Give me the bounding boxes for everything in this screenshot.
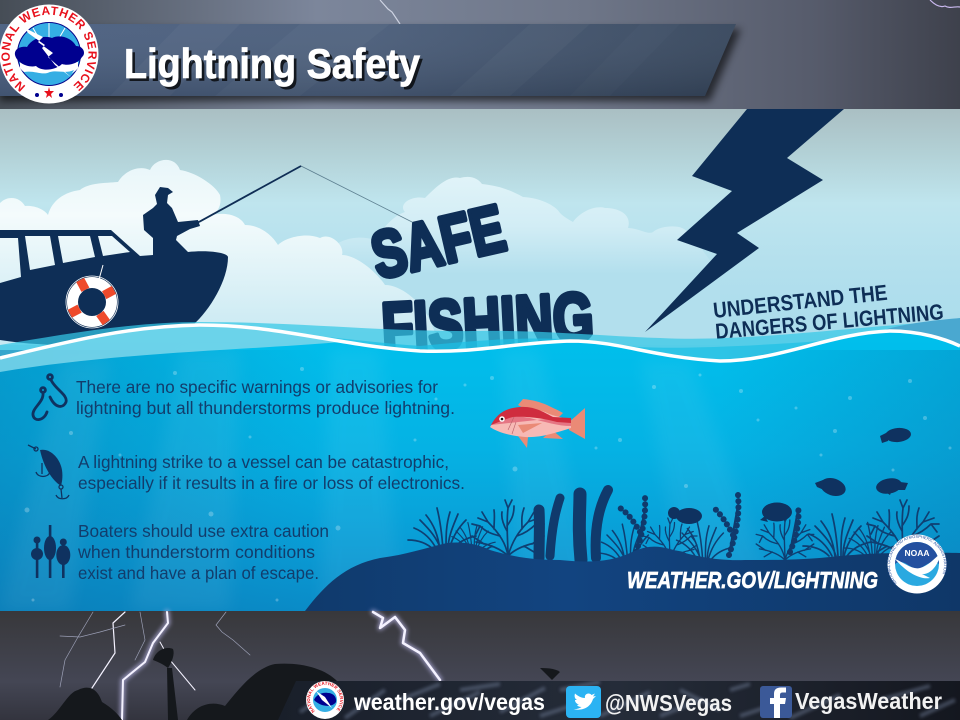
text block: warnings: lightning but all thunderstorms produce lightning. [76, 398, 455, 418]
icon: facebook [760, 686, 792, 718]
coral silhouettes [408, 490, 939, 562]
twitter handle: @NWSVegas [605, 690, 732, 716]
clouds, front layer [0, 160, 440, 345]
social bar [278, 681, 960, 720]
text block: warnings [76, 377, 455, 418]
text block: caution: Boaters should use extra caution [78, 521, 329, 541]
main panel: sky [0, 109, 960, 611]
text block: caution: exist and have a plan of escape. [78, 563, 319, 583]
tagline: UNDERSTAND THE [712, 280, 889, 323]
NOAA logo: NOAA [904, 548, 930, 558]
NWS logo: NATIONAL WEATHER SERVICE [1, 6, 97, 92]
text block: warnings: There are no specific warnings or advisories for [76, 377, 438, 397]
website address: WEATHER.GOV/LIGHTNING [627, 567, 878, 593]
SAFE FISHING heading: FISHING [380, 278, 595, 367]
title: Lightning Safety [127, 43, 424, 90]
SAFE FISHING heading [371, 202, 593, 350]
icon: twitter [566, 686, 601, 718]
top background [0, 0, 960, 109]
trees silhouette [48, 648, 560, 720]
NOAA logo: NATIONAL OCEANIC AND ATMOSPHERIC ADMINISTRATION [887, 535, 947, 584]
line and rod [197, 166, 416, 224]
water surface waves [0, 318, 960, 360]
icon: fish hooks [33, 375, 66, 420]
boat with fisherman [0, 187, 228, 346]
clouds, back layer [330, 177, 720, 345]
red snapper [490, 399, 585, 448]
swimming fish silhouettes [668, 427, 912, 524]
lifebuoy [66, 265, 118, 328]
bottom photo background [0, 611, 960, 720]
icon: bobbers [31, 525, 70, 578]
website label: weather.gov/vegas [353, 689, 545, 715]
sea floor [305, 542, 960, 611]
water edge line [0, 325, 960, 361]
text block: caution [77, 521, 329, 583]
text block: caution: when thunderstorm conditions [77, 542, 315, 562]
underwater [0, 325, 960, 611]
title: Lightning Safety [124, 40, 421, 87]
SAFE FISHING heading: SAFE [365, 190, 512, 293]
lightning photo strikes [60, 612, 440, 720]
small NWS logo: NATIONAL WEATHER SERVICE [306, 682, 344, 713]
text block: strike [78, 452, 465, 493]
text block: strike: especially if it results in a fire or loss of electronics. [78, 473, 465, 493]
lightning bolt [645, 109, 844, 332]
title banner [0, 24, 741, 101]
tagline [714, 284, 943, 339]
icon: lure [28, 445, 69, 499]
facebook handle: VegasWeather [795, 688, 942, 714]
text block: strike: A lightning strike to a vessel can be catastrophic, [78, 452, 449, 472]
